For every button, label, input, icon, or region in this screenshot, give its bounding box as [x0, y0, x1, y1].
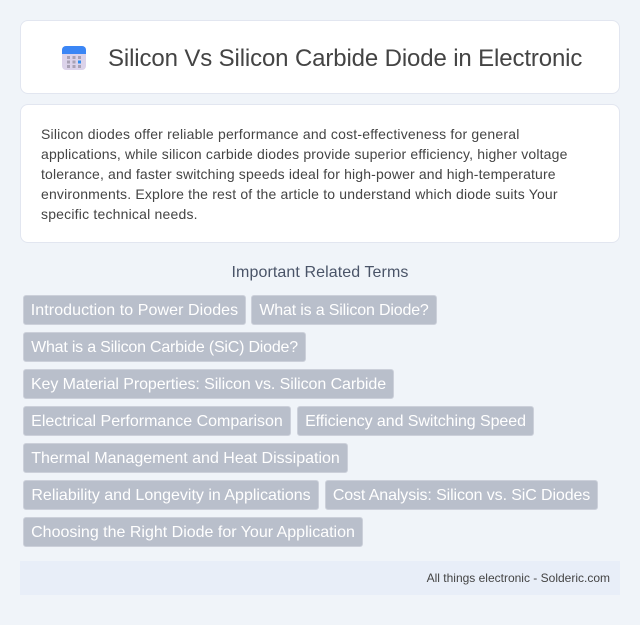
tag	[23, 406, 291, 436]
tag: Efficiency and Switching Speed	[305, 413, 526, 430]
tag: Thermal Management and Heat Dissipation	[31, 450, 340, 467]
tag	[23, 517, 363, 547]
tag	[23, 443, 348, 473]
panel: summary card	[20, 104, 620, 243]
footer credit: All things electronic - Solderic.com	[427, 571, 610, 585]
text block: summary	[41, 126, 568, 222]
tag	[297, 406, 534, 436]
panel: header card	[20, 20, 620, 94]
tag: Key Material Properties: Silicon vs. Silicon Carbide	[31, 376, 386, 393]
icon: calendar	[62, 46, 86, 70]
heading: related terms: Important Related Terms	[232, 264, 408, 281]
tag	[23, 480, 319, 510]
tag: Cost Analysis: Silicon vs. SiC Diodes	[333, 487, 590, 504]
tag	[23, 332, 306, 362]
tag: Electrical Performance Comparison	[31, 413, 283, 430]
text block: summary: applications, while silicon carbide diodes provide superior efficiency, higher voltage	[41, 146, 568, 162]
tag: Choosing the Right Diode for Your Application	[31, 524, 355, 541]
tag: Introduction to Power Diodes	[31, 302, 238, 319]
footer bar	[20, 561, 620, 595]
tag: What is a Silicon Carbide (SiC) Diode?	[31, 339, 298, 356]
text block: summary: tolerance, and faster switching speeds ideal for high-power and high-temperature	[41, 166, 556, 182]
text block: summary: specific technical needs.	[41, 206, 198, 222]
tag	[325, 480, 598, 510]
text block: summary: Silicon diodes offer reliable performance and cost-effectiveness for general	[41, 126, 520, 142]
tag: Reliability and Longevity in Applications	[31, 487, 311, 504]
tag	[251, 295, 437, 325]
tag: What is a Silicon Diode?	[259, 302, 429, 319]
tag	[23, 369, 394, 399]
tag list	[23, 295, 598, 547]
text block: summary: environments. Explore the rest of the article to understand which diode suits Your	[41, 186, 558, 202]
title: Silicon Vs Silicon Carbide Diode in Electronic	[108, 45, 582, 72]
tag	[23, 295, 246, 325]
